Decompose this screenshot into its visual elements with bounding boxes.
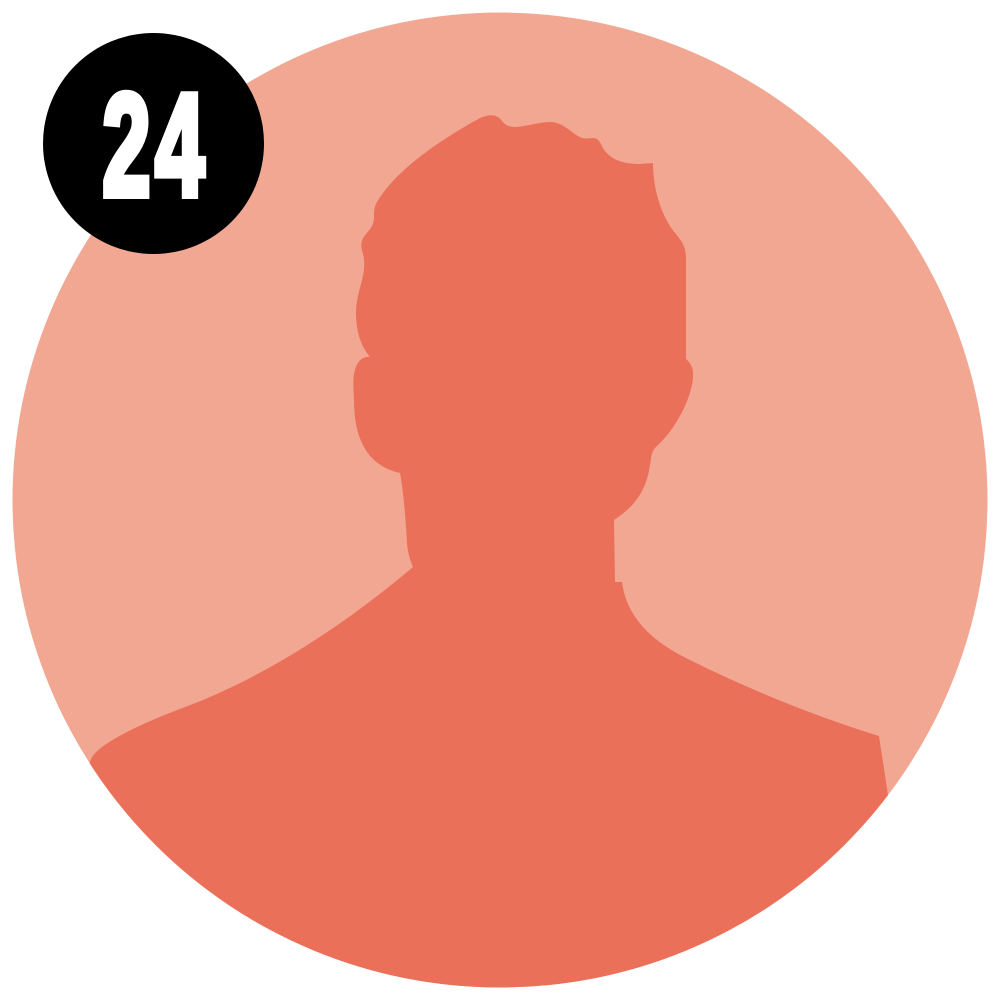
number badge — [43, 33, 264, 254]
badge number: 2 — [102, 64, 150, 226]
badge circle — [43, 33, 264, 254]
badge number: 4 — [155, 64, 204, 226]
person silhouette — [80, 115, 889, 1000]
